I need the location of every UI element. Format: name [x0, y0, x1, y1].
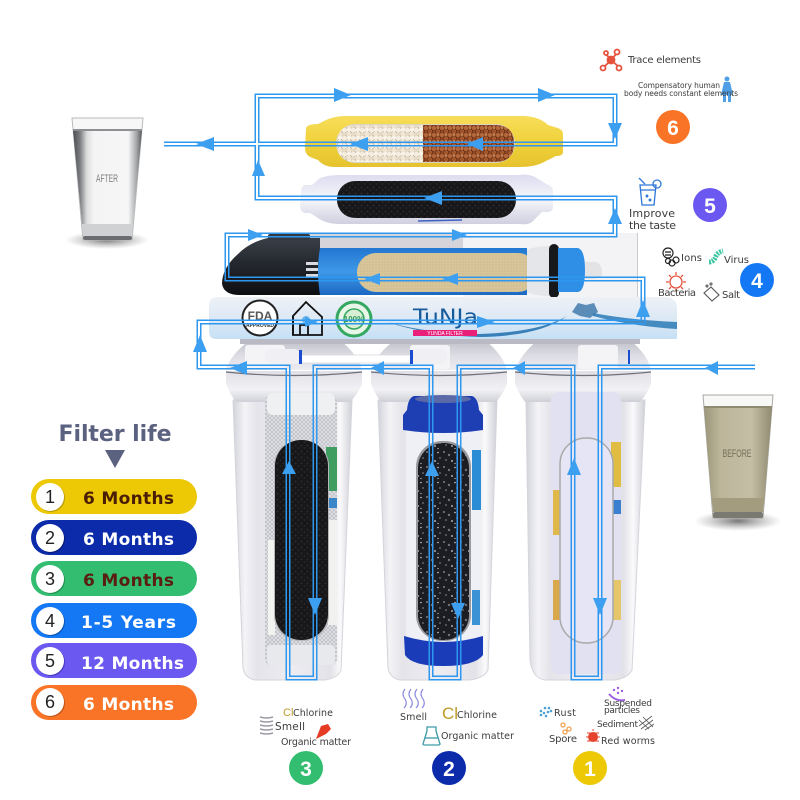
panel: stage 3 removes: Cl — [283, 707, 293, 719]
badge: FDA approved: FDA — [248, 309, 273, 323]
badge: FDA approved: APPROVED — [246, 323, 274, 329]
icon: drink — [639, 178, 661, 205]
row 5 — [31, 643, 197, 678]
icon: human body — [721, 76, 733, 102]
badge 2: 2 — [443, 758, 455, 781]
panel: stage 6 benefits: body needs constant elements — [624, 89, 738, 98]
brand logo: YUNDA FILTER — [427, 331, 463, 337]
panel: stage 4 benefits: Virus — [724, 255, 749, 266]
badge: green seal: 100% — [344, 315, 364, 324]
icon: sediment hatch — [639, 716, 654, 730]
filter cartridge: stage 1 PP cotton — [551, 392, 621, 674]
icon: flask — [423, 727, 440, 745]
panel: stage 3 removes — [260, 707, 351, 785]
panel: grey back plate behind membrane — [290, 233, 638, 303]
panel: stage 2 removes: Smell — [400, 712, 427, 723]
filter cartridge: stage 6 mineral — [305, 116, 563, 167]
connector tube between housings — [265, 349, 630, 364]
row 1: 6 Months — [83, 489, 174, 509]
panel: stage 4 benefits: Salt — [722, 290, 740, 301]
row 1: 1 — [45, 487, 55, 507]
glass: after: AFTER — [96, 173, 118, 185]
panel: stage 4 benefits: Ions — [681, 253, 702, 264]
panel: filter life list — [31, 479, 197, 720]
filter cartridge: stage 2 granular carbon — [403, 395, 483, 666]
panel: stage 1 removes: particles — [604, 706, 640, 716]
row 4 — [31, 603, 197, 638]
icon: down arrow — [105, 450, 125, 468]
row 4: 4 — [45, 611, 55, 631]
panel: stage 5 benefits: the taste — [629, 219, 676, 232]
row 3 — [31, 561, 197, 596]
badge 4: 4 — [751, 270, 763, 293]
panel: stage 2 removes: Chlorine — [457, 710, 497, 721]
panel: stage 1 removes — [540, 687, 655, 785]
row 6: 6 Months — [83, 695, 174, 715]
housing: stage 1 — [515, 340, 651, 680]
panel: stage 2 removes: Organic matter — [441, 731, 514, 742]
panel: stage 4 benefits — [658, 248, 774, 301]
panel: stage 2 removes: Cl — [442, 704, 458, 723]
badge 1: 1 — [584, 758, 596, 781]
panel: stage 1 removes: Red worms — [601, 736, 655, 747]
icon: virus DNA — [709, 251, 723, 262]
row 2: 2 — [45, 528, 55, 548]
panel: stage 1 removes: Rust — [554, 708, 576, 719]
panel: stage 5 benefits: Improve — [629, 207, 675, 220]
housing: stage 3 — [226, 340, 362, 680]
icon: bacteria — [666, 272, 686, 292]
icon: house with water drop — [293, 302, 322, 335]
panel: stage 4 benefits: Bacteria — [658, 288, 696, 299]
glass: before — [694, 395, 782, 531]
housing: stage 2 — [371, 340, 507, 680]
filter cartridge: stage 5 post carbon — [300, 175, 553, 224]
icon: rust dots — [540, 707, 552, 717]
water flow double line — [164, 94, 755, 680]
heading: Filter life: Filter life — [58, 422, 172, 447]
panel: stage 3 removes: Smell — [275, 721, 305, 733]
badge 3: 3 — [300, 758, 312, 781]
filter cartridge: stage 3 carbon block — [265, 393, 337, 665]
icon: suspended particles — [609, 687, 625, 700]
panel: stage 1 removes: Sediment — [597, 720, 638, 730]
glass: before: BEFORE — [722, 448, 752, 460]
badge 6: 6 — [667, 117, 679, 140]
panel: stage 2 removes — [400, 689, 514, 785]
row 6 — [31, 685, 197, 720]
water splash — [387, 303, 677, 337]
icon: salt — [704, 283, 719, 301]
badge 5: 5 — [704, 195, 716, 218]
badge: green seal — [337, 302, 371, 336]
row 2 — [31, 520, 197, 555]
brand logo: TuNJa — [412, 305, 478, 329]
row 1 — [31, 479, 197, 514]
panel: stage 3 removes: Organic matter — [281, 737, 351, 748]
icon: red worm bug — [586, 729, 600, 742]
panel: stage 6 benefits: Compensatory human — [638, 81, 720, 90]
row 3: 3 — [45, 569, 55, 589]
row 4: 1-5 Years — [81, 613, 176, 633]
panel: stage 1 removes: Suspended — [604, 699, 652, 709]
glass: after — [65, 118, 149, 249]
icon: trace elements — [600, 50, 622, 70]
flow arrows — [193, 88, 718, 619]
badge: FDA approved — [242, 300, 278, 336]
row 5: 5 — [45, 651, 55, 671]
row 5: 12 Months — [81, 654, 184, 674]
brand logo — [412, 305, 478, 337]
icon: organic dropper — [316, 724, 331, 739]
icon: smell waves — [403, 689, 424, 708]
RO membrane and pump: stage 4 — [222, 234, 602, 298]
panel: stage 1 removes: Spore — [549, 734, 577, 745]
panel: stage 6 benefits: Trace elements — [627, 55, 701, 66]
row 3: 6 Months — [83, 571, 174, 591]
icon: ions — [663, 248, 679, 266]
row 2: 6 Months — [83, 530, 174, 550]
icon: spore — [561, 723, 571, 734]
panel: stage 5 benefits — [629, 178, 727, 232]
row 6: 6 — [45, 692, 55, 712]
icon: smell waves — [260, 717, 273, 734]
panel: stage 3 removes: Chlorine — [293, 708, 333, 719]
panel: brand shelf — [209, 297, 677, 344]
heading: Filter life — [58, 422, 172, 468]
panel: stage 6 benefits — [600, 50, 738, 144]
